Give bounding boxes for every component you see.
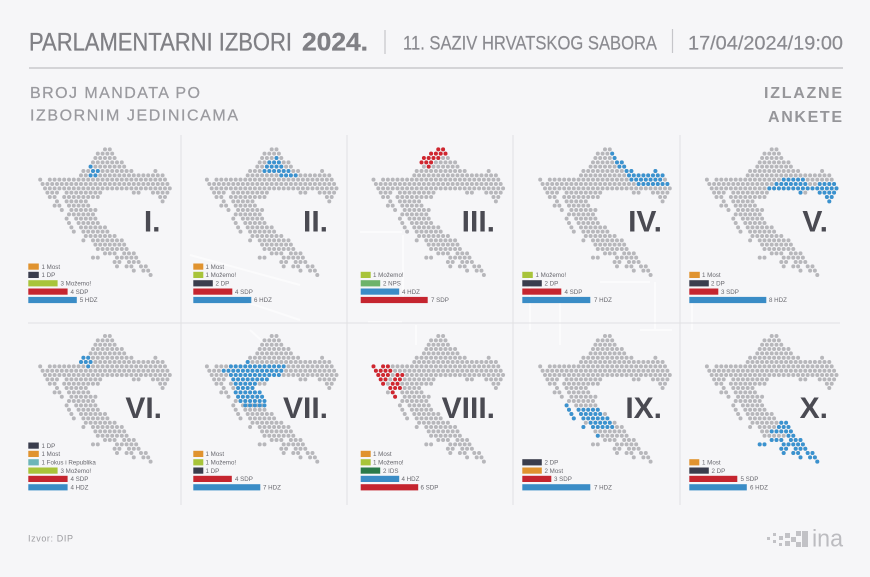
- legend VIII: 4 HDZ: [402, 476, 420, 483]
- legend II: 1 Most: [206, 264, 224, 271]
- logo: Hina: ina: [812, 526, 844, 552]
- map: constituency VIII: [373, 336, 503, 462]
- legend V: 3 SDP: [721, 289, 739, 296]
- numeral V: V.: [802, 206, 828, 238]
- legend II: 4 SDP: [235, 289, 253, 296]
- panel: IV: [522, 149, 670, 304]
- legend V: 2 DP: [711, 280, 725, 288]
- map: constituency X: [707, 336, 837, 462]
- legend IV: [522, 272, 612, 304]
- numeral VII: VII.: [283, 392, 328, 425]
- legend III: 1 Možemo!: [373, 272, 404, 279]
- legend I: 1 Most: [42, 264, 60, 271]
- legend VII: 1 Možemo!: [206, 460, 236, 466]
- legend X: 1 Most: [702, 460, 721, 466]
- legend VI: 1 DP: [42, 443, 55, 450]
- panel: VI: [28, 336, 170, 492]
- legend VI: 1 Fokus i Republika: [42, 460, 96, 466]
- legend III: [361, 272, 449, 304]
- legend X: 2 DP: [712, 468, 725, 475]
- date and time: 17/04/2024/19:00: [688, 32, 843, 54]
- legend VI: 3 Možemo!: [60, 468, 91, 475]
- panel: VIII: [361, 336, 503, 492]
- legend IV: 7 HDZ: [594, 297, 612, 304]
- heading: izlazne ankete: IZLAZNE: [764, 85, 842, 102]
- title: PARLAMENTARNI IZBORI: [29, 28, 292, 56]
- legend IV: 4 SDP: [564, 289, 582, 296]
- panel: II: [193, 149, 337, 304]
- numeral II: II.: [303, 206, 328, 238]
- numeral X: X.: [800, 392, 828, 425]
- panel: I: [28, 149, 170, 304]
- legend VIII: 2 IDS: [383, 468, 398, 475]
- legend I: 3 Možemo!: [60, 280, 91, 288]
- legend V: 8 HDZ: [769, 297, 787, 304]
- legend IX: 3 SDP: [554, 476, 572, 483]
- heading: broj mandata: IZBORNIM JEDINICAMA: [30, 108, 238, 124]
- legend IX: [522, 459, 612, 492]
- legend VII: 4 SDP: [235, 476, 253, 483]
- subtitle: saziv: 11. SAZIV HRVATSKOG SABORA: [403, 32, 657, 54]
- legend VIII: 6 SDP: [420, 484, 438, 492]
- legend IX: 2 DP: [544, 460, 558, 466]
- map: constituency VII: [207, 336, 337, 462]
- legend VII: 1 DP: [206, 468, 219, 475]
- legend I: 1 DP: [42, 272, 55, 279]
- legend III: 4 HDZ: [402, 289, 420, 296]
- legend I: 4 SDP: [70, 289, 88, 296]
- legend I: 5 HDZ: [80, 297, 98, 304]
- numeral IX: IX.: [625, 392, 662, 425]
- legend VII: 1 Most: [206, 451, 224, 458]
- numeral III: III.: [462, 206, 495, 238]
- legend VI: [28, 442, 96, 492]
- legend IV: 2 DP: [544, 280, 558, 288]
- legend VIII: 1 Most: [373, 451, 392, 458]
- legend X: 6 HDZ: [750, 484, 768, 492]
- legend VI: 4 HDZ: [70, 484, 89, 492]
- map: constituency IV: [540, 149, 670, 275]
- legend II: 6 HDZ: [254, 297, 272, 304]
- legend VI: 1 Most: [42, 451, 60, 458]
- legend II: 1 Možemo!: [206, 272, 236, 279]
- map: constituency I: [40, 149, 170, 275]
- map: constituency IX: [540, 336, 670, 462]
- legend VI: 4 SDP: [70, 476, 88, 483]
- map: constituency III: [373, 149, 503, 275]
- legend III: 2 NPS: [383, 280, 401, 288]
- legend III: 7 SDP: [431, 297, 449, 304]
- source note: Izvor: DIP: [28, 534, 73, 544]
- panel: III: [361, 149, 503, 304]
- panel: V: [689, 149, 837, 304]
- legend IX: 2 Most: [544, 468, 563, 475]
- heading: izlazne ankete: [764, 85, 842, 126]
- legend II: [193, 264, 272, 304]
- legend X: [689, 459, 768, 492]
- heading: broj mandata: [30, 85, 238, 124]
- numeral VIII: VIII.: [442, 392, 495, 425]
- map: constituency V: [707, 149, 837, 275]
- title: 2024.: [302, 28, 368, 56]
- legend V: [689, 272, 787, 304]
- numeral IV: IV.: [628, 206, 662, 238]
- numeral VI: VI.: [125, 392, 162, 425]
- legend VIII: 1 Možemo!: [373, 460, 404, 466]
- legend VII: 7 HDZ: [263, 484, 281, 492]
- panel: VII: [193, 336, 337, 492]
- heading: broj mandata: BROJ MANDATA PO: [30, 85, 200, 102]
- map: constituency II: [207, 149, 337, 275]
- legend IV: 1 Možemo!: [536, 272, 566, 279]
- legend I: [28, 264, 98, 304]
- legend VII: [193, 451, 281, 492]
- legend IX: 7 HDZ: [594, 484, 612, 492]
- legend X: 5 SDP: [740, 476, 758, 483]
- logo: Hina: [767, 526, 844, 552]
- legend II: 2 DP: [216, 280, 229, 288]
- heading: izlazne ankete: ANKETE: [768, 109, 842, 126]
- numeral I: I.: [144, 206, 160, 238]
- panel: X: [689, 336, 837, 492]
- panel: IX: [522, 336, 670, 492]
- map: constituency VI: [40, 336, 170, 462]
- legend VIII: [361, 451, 438, 492]
- legend V: 1 Most: [702, 272, 721, 279]
